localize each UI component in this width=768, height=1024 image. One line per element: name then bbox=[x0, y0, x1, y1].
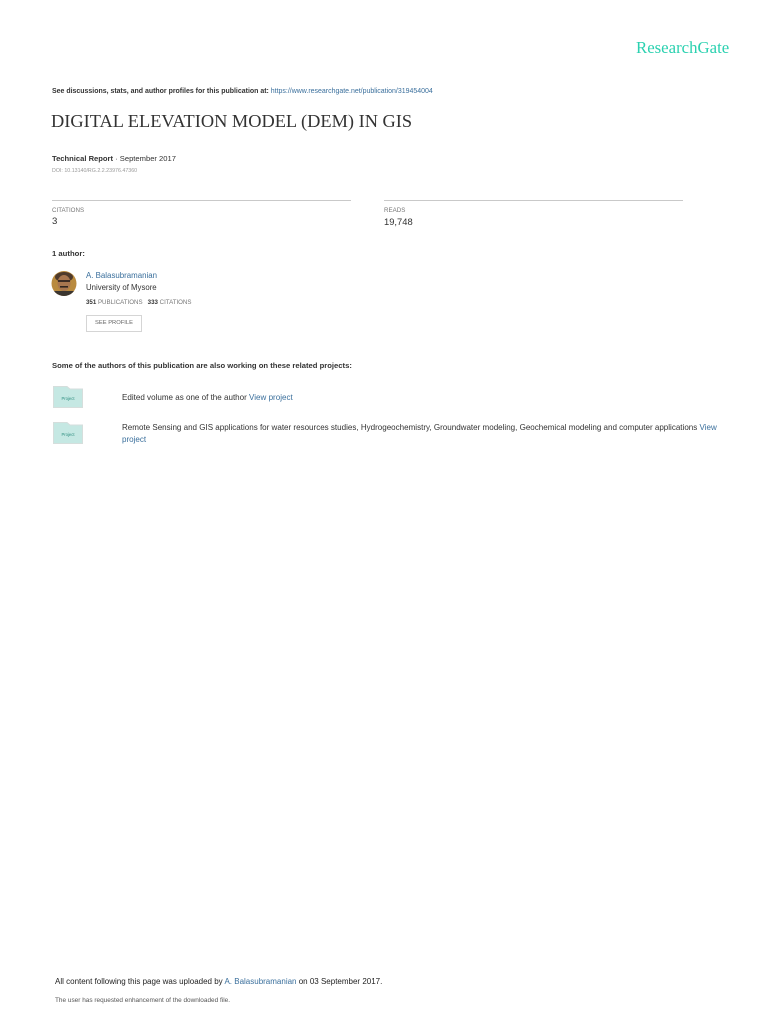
stat: citations: 3 bbox=[52, 216, 57, 227]
author stats: 351 PUBLICATIONS 333 CITATIONS bbox=[86, 299, 191, 306]
upload note: All content following this page was uploaded by A. Balasubramanian on 03 September 2017. bbox=[55, 977, 382, 986]
button: see profile bbox=[86, 315, 142, 332]
author name: A. Balasubramanian bbox=[86, 271, 157, 280]
DOI: DOI: 10.13140/RG.2.2.23976.47360 bbox=[52, 168, 137, 174]
heading: authors: 1 author: bbox=[52, 249, 85, 258]
stat: reads bbox=[384, 207, 413, 227]
heading: related projects: Some of the authors of this publication are also working on these related projects: bbox=[52, 361, 352, 370]
icon: project folder 2 bbox=[53, 422, 83, 444]
stat: reads: 19,748 bbox=[384, 216, 413, 227]
project 2 text: Remote Sensing and GIS applications for water resources studies, Hydrogeochemistry, Groundwater modeling, Geochemical modeling and computer applications View bbox=[122, 423, 717, 432]
project 2 text bbox=[122, 423, 717, 444]
icon: project folder 1 bbox=[53, 386, 83, 408]
stat: citations: CITATIONS bbox=[52, 207, 84, 214]
icon: project folder 1: Project bbox=[61, 396, 75, 401]
source line: See discussions, stats, and author profiles for this publication at: https://www.researchgate.net/publication/319454004 bbox=[52, 88, 433, 95]
button: see profile: SEE PROFILE bbox=[95, 320, 133, 326]
title: DIGITAL ELEVATION MODEL (DEM) IN GIS bbox=[51, 111, 412, 131]
stat: citations bbox=[52, 207, 84, 227]
author affiliation: University of Mysore bbox=[86, 283, 157, 292]
project 1 text: Edited volume as one of the author View project bbox=[122, 393, 293, 402]
footer note: The user has requested enhancement of the downloaded file. bbox=[55, 997, 230, 1004]
logo: ResearchGate: ResearchGate bbox=[636, 38, 729, 57]
stat: reads: READS bbox=[384, 207, 405, 214]
project 2 text: project bbox=[122, 435, 146, 444]
report type and date: Technical Report · September 2017 bbox=[52, 154, 176, 163]
icon: author portrait bbox=[52, 271, 76, 296]
icon: project folder 2: Project bbox=[61, 432, 75, 437]
